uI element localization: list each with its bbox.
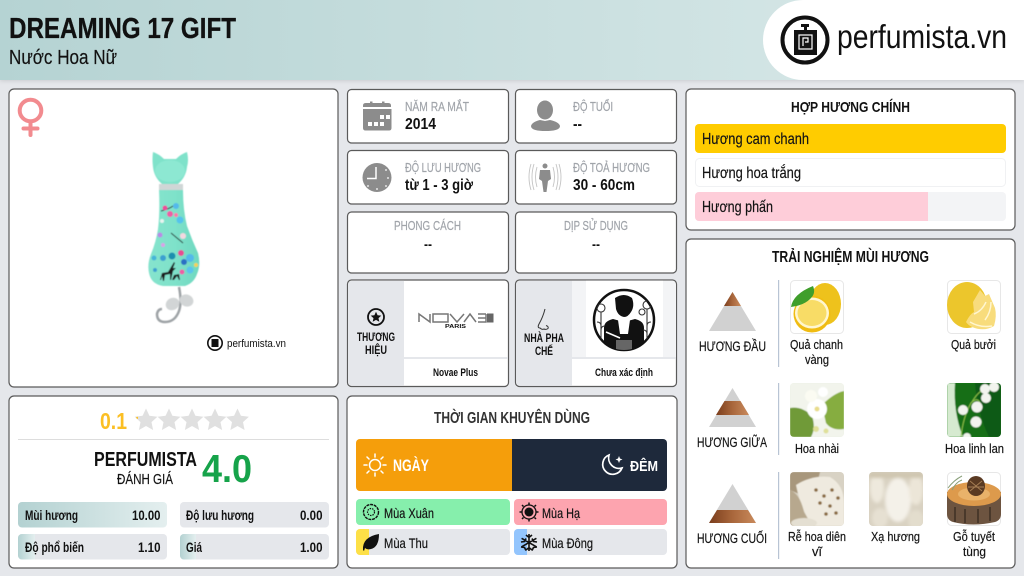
panel: main accords xyxy=(686,89,1015,230)
brand logo: Novae xyxy=(419,314,494,330)
subtitle: Nước Hoa Nữ xyxy=(9,47,117,69)
icon: nose xyxy=(538,309,548,329)
card: release year: 2014 xyxy=(405,116,436,133)
product bottle xyxy=(148,152,199,322)
score bars xyxy=(18,502,329,560)
season: summer: Mùa Hạ xyxy=(542,505,580,521)
pyramid: top notes: HƯƠNG ĐẦU xyxy=(699,338,766,354)
note: lily of the valley xyxy=(945,382,1004,456)
card: age: ĐỘ TUỔI xyxy=(573,99,613,114)
note: cedar wood: Gỗ tuyết xyxy=(953,529,995,544)
pyramid: middle notes xyxy=(697,388,767,450)
heading: TRẢI NGHIỆM MÙI HƯƠNG xyxy=(772,247,929,266)
card: release year: NĂM RA MẮT xyxy=(405,99,469,114)
icon: moon xyxy=(603,455,622,474)
panel: scent experience xyxy=(686,239,1015,568)
accord: citrus xyxy=(695,124,1006,153)
night bar xyxy=(512,439,667,491)
day bar: NGÀY xyxy=(393,456,429,475)
icon: female symbol xyxy=(20,100,41,135)
note: orris root: Rễ hoa diên xyxy=(788,529,846,544)
card: age xyxy=(516,90,676,143)
icon: brand star xyxy=(368,309,384,325)
header band xyxy=(0,0,1024,80)
panel: product image xyxy=(9,89,338,387)
score bars: 0.00 xyxy=(300,507,323,523)
note: jasmine: Hoa nhài xyxy=(795,441,839,456)
card: perfumer: CHẾ xyxy=(535,343,553,358)
accord: white floral: Hương hoa trắng xyxy=(702,163,801,182)
card: brand: Novae Plus xyxy=(433,367,478,379)
note: musk: Xạ hương xyxy=(871,529,920,544)
logo: perfumista xyxy=(763,0,1024,80)
star rating xyxy=(135,408,249,430)
card: perfumer: Chưa xác định xyxy=(595,367,653,379)
pyramid: base notes xyxy=(697,484,767,546)
pyramid: base notes: HƯƠNG CUỐI xyxy=(697,529,767,546)
note: orris root: vĩ xyxy=(812,544,823,559)
card: style: PHONG CÁCH xyxy=(394,218,461,233)
card: occasion: DỊP SỬ DỤNG xyxy=(564,218,628,233)
note: lily of the valley: Hoa linh lan xyxy=(945,441,1004,456)
note: jasmine xyxy=(790,383,844,456)
accord: citrus: Hương cam chanh xyxy=(702,131,809,148)
card: longevity xyxy=(348,150,508,204)
season: winter: Mùa Đông xyxy=(542,535,593,551)
note: lemon: vàng xyxy=(805,352,829,367)
perfumista label: PERFUMISTA xyxy=(94,449,197,471)
card: perfumer: NHÀ PHA xyxy=(524,330,564,345)
note: lemon xyxy=(790,280,844,367)
panel: rating: ĐÁNH GIÁ xyxy=(117,471,173,488)
card: longevity: từ 1 - 3 giờ xyxy=(405,177,474,194)
card: brand: HIỆU xyxy=(365,342,387,357)
note: cedar wood xyxy=(947,472,1001,559)
icon: sun xyxy=(364,454,386,476)
season: summer xyxy=(514,499,667,525)
pyramid: middle notes: HƯƠNG GIỮA xyxy=(697,434,767,450)
note: lemon: Quả chanh xyxy=(790,337,843,352)
season: autumn: Mùa Thu xyxy=(384,535,428,551)
note: musk xyxy=(869,472,924,544)
accord: white floral xyxy=(696,158,1006,186)
night bar: ĐÊM xyxy=(630,457,658,475)
score bars: Độ phổ biến xyxy=(25,539,84,555)
title: DREAMING 17 GIFT xyxy=(9,13,236,45)
note: pomelo: Quả bưởi xyxy=(951,337,996,352)
panel: recommended time xyxy=(347,396,677,568)
icon: clock xyxy=(362,163,392,192)
perfumista score: 4.0 xyxy=(202,448,252,491)
score bars: Giá xyxy=(186,539,202,555)
accord: powdery: Hương phấn xyxy=(702,199,773,216)
card: age: -- xyxy=(573,116,582,133)
card: projection: ĐỘ TOẢ HƯƠNG xyxy=(573,160,650,175)
accord: powdery xyxy=(695,192,1006,221)
card: perfumer xyxy=(516,280,676,386)
day bar xyxy=(356,439,512,491)
card: brand: THƯƠNG xyxy=(357,330,395,344)
icon: scent radius person xyxy=(529,164,561,192)
brand logo: Novae: PARIS xyxy=(445,324,466,330)
card: projection: 30 - 60cm xyxy=(573,177,635,194)
pyramid: top notes xyxy=(699,292,766,354)
card: projection xyxy=(516,150,676,204)
score bars: 10.00 xyxy=(132,507,161,523)
score bars: Mùi hương xyxy=(25,507,78,523)
card: brand xyxy=(348,280,508,386)
card: occasion xyxy=(516,212,676,273)
heading: THỜI GIAN KHUYÊN DÙNG xyxy=(434,408,590,427)
watermark logo xyxy=(208,336,286,350)
user score: 0.1 xyxy=(100,408,127,434)
score bars: Độ lưu hương xyxy=(186,507,254,523)
card: longevity: ĐỘ LƯU HƯƠNG xyxy=(405,160,481,175)
season: spring: Mùa Xuân xyxy=(384,505,434,521)
card: occasion: -- xyxy=(592,236,600,252)
card: release year xyxy=(348,90,508,143)
perfumer illustration xyxy=(594,290,654,352)
note: cedar wood: tùng xyxy=(963,544,986,559)
note: orris root xyxy=(788,472,846,559)
card: style: -- xyxy=(424,236,432,252)
season: spring xyxy=(356,499,510,525)
score bars: 1.10 xyxy=(138,539,161,555)
watermark logo: perfumista.vn xyxy=(227,338,286,350)
icon: person xyxy=(531,100,560,131)
heading: HỢP HƯƠNG CHÍNH xyxy=(791,99,910,116)
season: autumn xyxy=(356,529,510,555)
icon: calendar xyxy=(363,102,392,130)
card: style xyxy=(348,212,508,273)
note: pomelo xyxy=(947,280,1000,352)
season: winter xyxy=(514,529,667,555)
score bars: 1.00 xyxy=(300,539,323,555)
panel: rating xyxy=(9,396,338,568)
